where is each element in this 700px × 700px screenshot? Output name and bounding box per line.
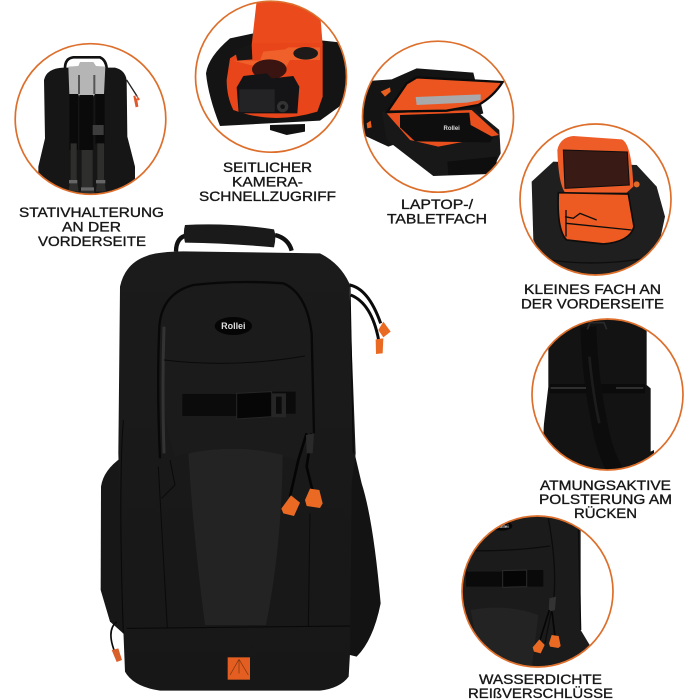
circle: laptop compartment [360, 68, 503, 176]
circle: waterproof zippers [460, 510, 591, 670]
sternum band [550, 387, 644, 389]
circle outline: small front compartment [520, 124, 671, 275]
zipper detail bag [460, 510, 591, 670]
reversed logo on sleeve: Rollei [444, 126, 460, 132]
top right zipper with orange pulls [349, 285, 391, 354]
label: small front compartment: DER VORDERSEITE [521, 296, 664, 312]
central lighter panel [188, 449, 283, 625]
label: waterproof zippers [468, 671, 613, 700]
open lid [557, 136, 633, 193]
tripod silver head [68, 62, 105, 97]
orange interior [227, 43, 323, 118]
label: tripod holder: AN DER [62, 218, 121, 234]
front pocket upper panel [158, 284, 313, 460]
laptop bag base [393, 114, 501, 176]
lower side seams [158, 460, 310, 628]
label: tripod holder: VORDERSEITE [38, 233, 146, 249]
Rollei logo badge [215, 317, 252, 335]
label: side camera access: SCHNELLZUGRIFF [199, 188, 336, 204]
main backpack photo [101, 224, 391, 691]
label: laptop compartment: LAPTOP-/ [401, 196, 473, 212]
small logo: Rollei [496, 524, 509, 529]
padded back panel [544, 317, 654, 473]
laptop [416, 94, 481, 105]
circle: side camera access [206, 1, 348, 135]
label: tripod holder: STATIVHALTERUNG [19, 204, 164, 220]
side pocket left [101, 457, 125, 635]
tripod strap buckle [93, 125, 104, 135]
label: small front compartment [521, 281, 664, 312]
front pocket outline zip [158, 282, 314, 458]
small logo [496, 522, 512, 530]
circle outline: side camera access [196, 1, 346, 152]
circle outline: waterproof zippers [462, 516, 613, 667]
orange lid [252, 1, 323, 45]
small pocket bag body [532, 162, 665, 277]
orange lid [387, 77, 503, 112]
label: padded back: RÜCKEN [574, 504, 637, 521]
tripod orange zip pulls [127, 80, 137, 97]
label: waterproof zippers: WASSERDICHTE [479, 671, 602, 687]
label: padded back: ATMUNGSAKTIVE [540, 477, 671, 493]
label: padded back: POLSTERUNG AM [539, 491, 672, 507]
top carry handle [176, 224, 292, 252]
lens [252, 59, 287, 79]
shoulder strap [588, 327, 615, 470]
orange side pulls [367, 87, 391, 128]
Rollei logo badge: Rollei [221, 321, 246, 331]
label: side camera access: KAMERA- [232, 174, 303, 190]
camera [237, 73, 299, 113]
label: laptop compartment [387, 196, 487, 226]
front strap and buckle [182, 392, 296, 419]
label: side camera access [199, 159, 336, 204]
orange triangle logo patch [228, 657, 250, 680]
circle: tripod holder [38, 57, 140, 200]
orange pulls [533, 639, 545, 653]
lower orange interior [387, 110, 499, 147]
zipper central panel [482, 641, 530, 666]
tripod dark legs [68, 143, 106, 195]
body seams [121, 283, 353, 633]
circle: small front compartment [532, 136, 665, 277]
black tablet sleeve [400, 113, 493, 142]
backpack body [118, 251, 356, 691]
tripod black foam legs [69, 94, 105, 150]
tripod holder handle [65, 57, 107, 68]
zipper slider [549, 597, 556, 612]
label: laptop compartment: TABLETFACH [387, 210, 487, 226]
circle: padded back [544, 317, 654, 473]
camera bag body [206, 33, 348, 126]
tripod holder bag [38, 68, 135, 200]
circle outline: padded back [532, 319, 683, 470]
circle outline: laptop compartment [362, 41, 514, 192]
strap and buckle [466, 570, 543, 587]
lens cap [293, 47, 318, 60]
top loop [587, 323, 607, 329]
memory pocket [235, 44, 252, 61]
front zipper with orange pulls [281, 433, 323, 516]
mesh pocket [563, 150, 629, 188]
label: side camera access: SEITLICHER [223, 159, 312, 175]
orange pocket interior [558, 193, 634, 244]
circle outline: tripod holder [15, 44, 166, 194]
label: padded back [539, 477, 672, 521]
side mesh pocket right [343, 453, 381, 657]
lower left zipper pull [111, 622, 122, 662]
pocket orange tab [634, 181, 640, 187]
label: small front compartment: KLEINES FACH AN [524, 281, 661, 297]
label: tripod holder [19, 204, 164, 249]
laptop bag left side [360, 68, 483, 147]
